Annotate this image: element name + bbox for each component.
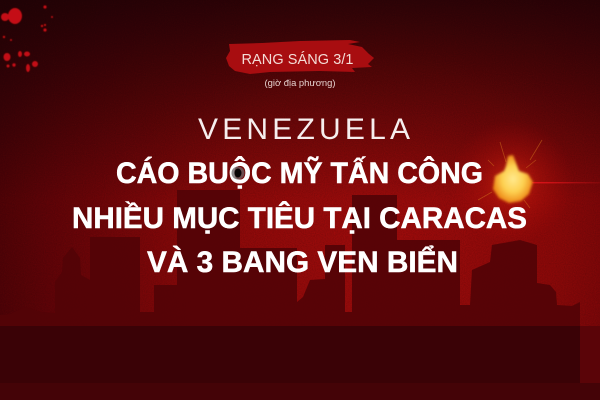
headline: line 1: CÁO BUỘC MỸ TẤN CÔNG [116,156,483,190]
blood splatter [1,5,53,72]
headline: line 3: VÀ 3 BANG VEN BIỂN [147,245,458,279]
local time note: (giờ địa phương) [264,78,336,88]
explosion [450,120,600,244]
brush stroke [226,40,374,74]
badge label: RẠNG SÁNG 3/1 [242,51,354,68]
headline: line 2: NHIỀU MỤC TIÊU TẠI CARACAS [72,201,527,235]
headline [72,113,527,279]
skyline foreground band [0,326,600,400]
headline: country: VENEZUELA [198,113,410,146]
bullet hole [232,166,244,180]
time badge [226,40,374,74]
city skyline silhouette [0,190,580,326]
